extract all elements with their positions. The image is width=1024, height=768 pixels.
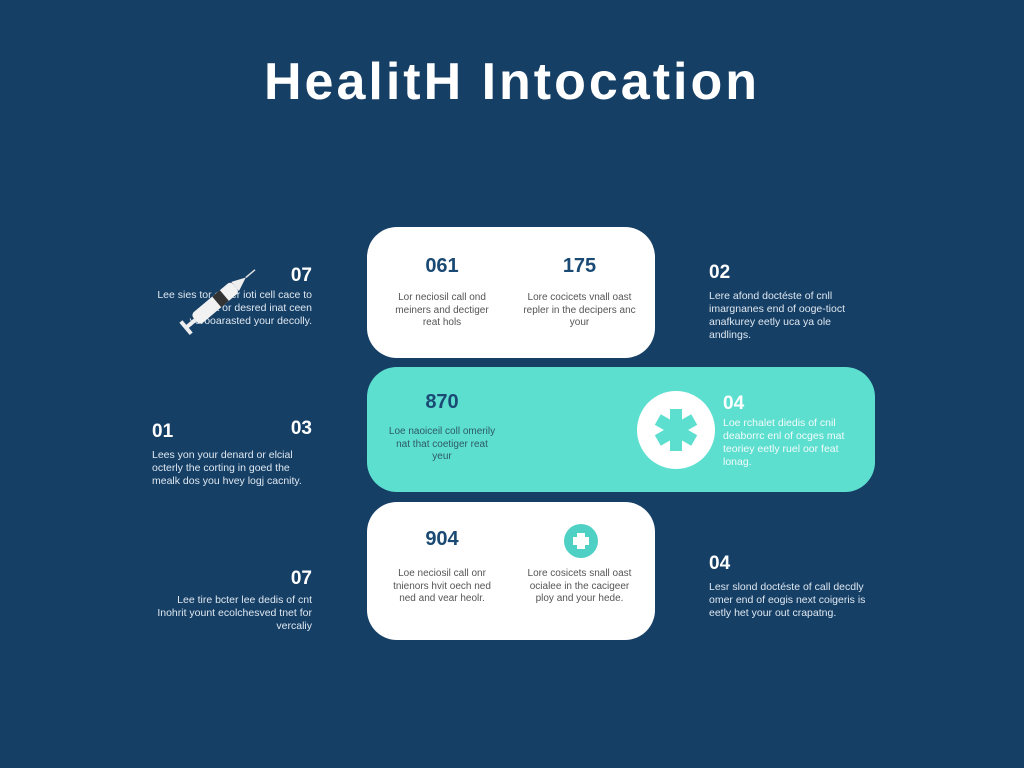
left block 2: 01 — [152, 421, 173, 442]
left block 3 — [157, 568, 312, 632]
card: top white: 175 — [563, 255, 596, 277]
left block 2: 03 — [291, 418, 312, 439]
card: top white: Lore cocicets vnall oast repler in the decipers anc your — [523, 292, 636, 328]
icon: syringe — [179, 269, 256, 335]
right block 04: Lesr slond doctéste of call decdly omer end of eogis next coigeris is eetly het your out crapatng. — [709, 581, 865, 619]
left block 1 — [157, 265, 312, 327]
card: bottom white: Lore cosicets snall oast ocialee in the cacigeer ploy and your hede. — [528, 568, 631, 604]
right block 04: 04 — [709, 553, 730, 574]
card: bottom white: 904 — [425, 528, 459, 550]
card: teal middle: 870 — [425, 391, 459, 413]
right block 02 — [709, 262, 845, 341]
card: bottom white — [367, 502, 655, 640]
card: teal middle: Loe rchalet diedis of cnil deaborrc enl of ocges mat teoriey eetly ruel oor feat lonag. — [723, 417, 844, 468]
card: bottom white: Loe neciosil call onr tnienors hvit oech ned ned and vear heolr. — [393, 568, 491, 604]
right block 02: 02 — [709, 262, 730, 283]
left block 1: 07 — [291, 265, 312, 286]
icon: plus circle — [564, 524, 598, 558]
card: top white: Lor neciosil call ond meiners and dectiger reat hols — [395, 292, 489, 328]
card: teal middle — [367, 367, 875, 492]
left block 2: Lees yon your denard or elcial octerly the corting in goed the mealk dos you hvey logj cacnity. — [152, 449, 302, 487]
card: teal middle: Loe naoiceil coll omerily nat that coetiger reat yeur — [389, 426, 495, 462]
card: top white: 061 — [425, 255, 459, 277]
left block 1: Lee sies tor al tier ioti cell cace to a or desred inat ceen yerooarasted your decolly. — [157, 289, 312, 327]
card: top white — [367, 227, 655, 358]
card: teal middle: 04 — [723, 393, 744, 414]
icon: medical star — [637, 391, 715, 469]
right block 02: Lere afond doctéste of cnll imargnanes end of ooge-tioct anafkurey eetly uca ya ole andlings. — [709, 290, 845, 341]
left block 3: Lee tire bcter lee dedis of cnt Inohrit yount ecolchesved tnet for vercaliy — [157, 594, 312, 632]
left block 3: 07 — [291, 568, 312, 589]
title: HealitH Intocation — [264, 53, 760, 111]
right block 04 — [709, 553, 865, 619]
left block 2 — [152, 418, 312, 487]
